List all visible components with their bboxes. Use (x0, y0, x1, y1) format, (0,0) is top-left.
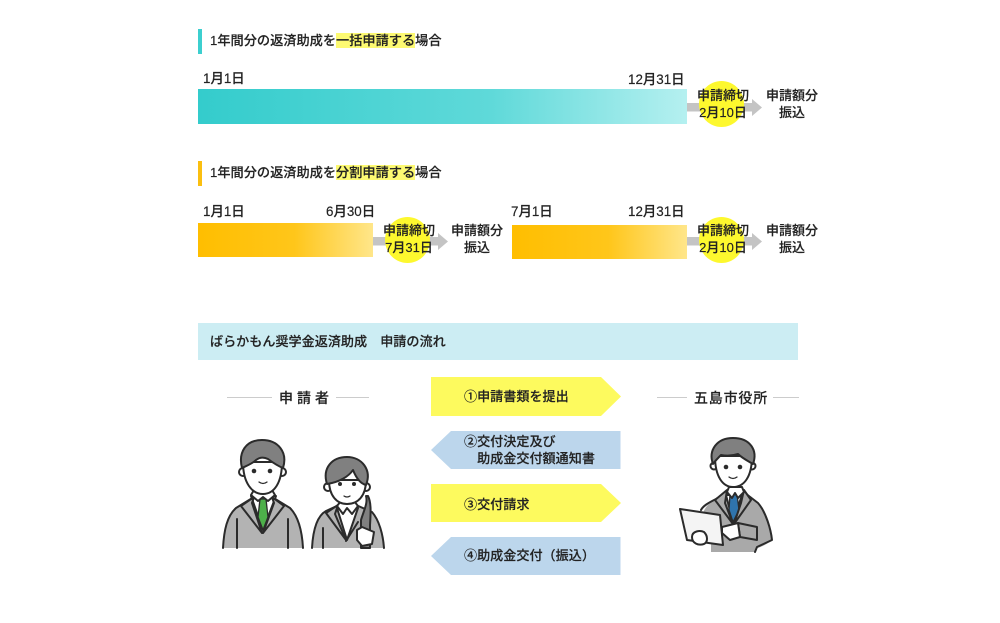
deadline text first half (383, 223, 435, 254)
icon: female applicant (312, 457, 384, 548)
deadline text first half: 申請締切 (383, 223, 435, 238)
payment text: 申請額分 (766, 88, 818, 103)
date label: December 31: 12月31日 (628, 204, 685, 219)
flow title banner (198, 323, 798, 360)
deadline text: 2月10日 (699, 104, 747, 120)
payment text first half: 申請額分 (451, 223, 503, 238)
icon: male applicant (223, 440, 303, 548)
step 4 text: ④助成金交付（振込） (464, 548, 595, 563)
arrow: second half to payment (687, 233, 762, 250)
flow title banner: ばらかもん奨学金返済助成 申請の流れ (210, 334, 446, 349)
arrow: to payment (687, 99, 762, 116)
step 2 text: ②交付決定及び (464, 434, 556, 449)
step 2 text: 助成金交付額通知書 (477, 450, 595, 466)
step 1 text: ①申請書類を提出 (464, 389, 569, 404)
step 2 text (464, 434, 595, 466)
payment text (766, 88, 818, 120)
date label: July 1: 7月1日 (511, 204, 553, 219)
step 4 arrow (431, 537, 620, 575)
date label: January 1: 1月1日 (203, 204, 245, 219)
teal period bar (198, 89, 687, 124)
icon: city office staff with tablet (680, 438, 772, 552)
payment text first half: 振込 (464, 240, 490, 254)
deadline circle second half (699, 217, 744, 263)
heading: split application: 1年間分の返済助成を分割申請する場合 (210, 165, 442, 180)
payment text first half (451, 223, 503, 254)
payment text second half (766, 223, 818, 254)
deadline text second half: 2月10日 (699, 240, 747, 254)
deadline text (697, 88, 749, 120)
payment text second half: 申請額分 (766, 223, 818, 238)
deadline text first half: 7月31日 (385, 240, 433, 254)
heading accent bar: teal (198, 29, 202, 54)
section 2: split application timeline (198, 161, 818, 263)
step 3 text: ③交付請求 (464, 497, 529, 512)
step 2 arrow (431, 431, 620, 469)
deadline text second half: 申請締切 (697, 223, 749, 238)
date label: June 30: 6月30日 (326, 204, 375, 219)
step 1 arrow (431, 377, 621, 416)
date label: January 1: 1月1日 (203, 71, 245, 86)
payment text second half: 振込 (779, 240, 805, 254)
city office header: 五島市役所 (694, 390, 768, 406)
section 1: lump-sum application timeline (198, 29, 818, 127)
amber period bar first half (198, 223, 373, 257)
deadline circle (699, 81, 744, 127)
applicant header: 申請者 (279, 390, 333, 406)
payment text: 振込 (779, 104, 805, 120)
arrow: first half to payment (373, 233, 448, 250)
step 3 arrow (431, 484, 621, 522)
deadline text: 申請締切 (697, 88, 749, 103)
heading: lump-sum application: 1年間分の返済助成を一括申請する場合 (210, 33, 442, 48)
heading accent bar: amber (198, 161, 202, 186)
amber period bar second half (512, 225, 687, 259)
deadline circle first half (385, 217, 430, 263)
date label: December 31: 12月31日 (628, 72, 685, 87)
deadline text second half (697, 223, 749, 254)
